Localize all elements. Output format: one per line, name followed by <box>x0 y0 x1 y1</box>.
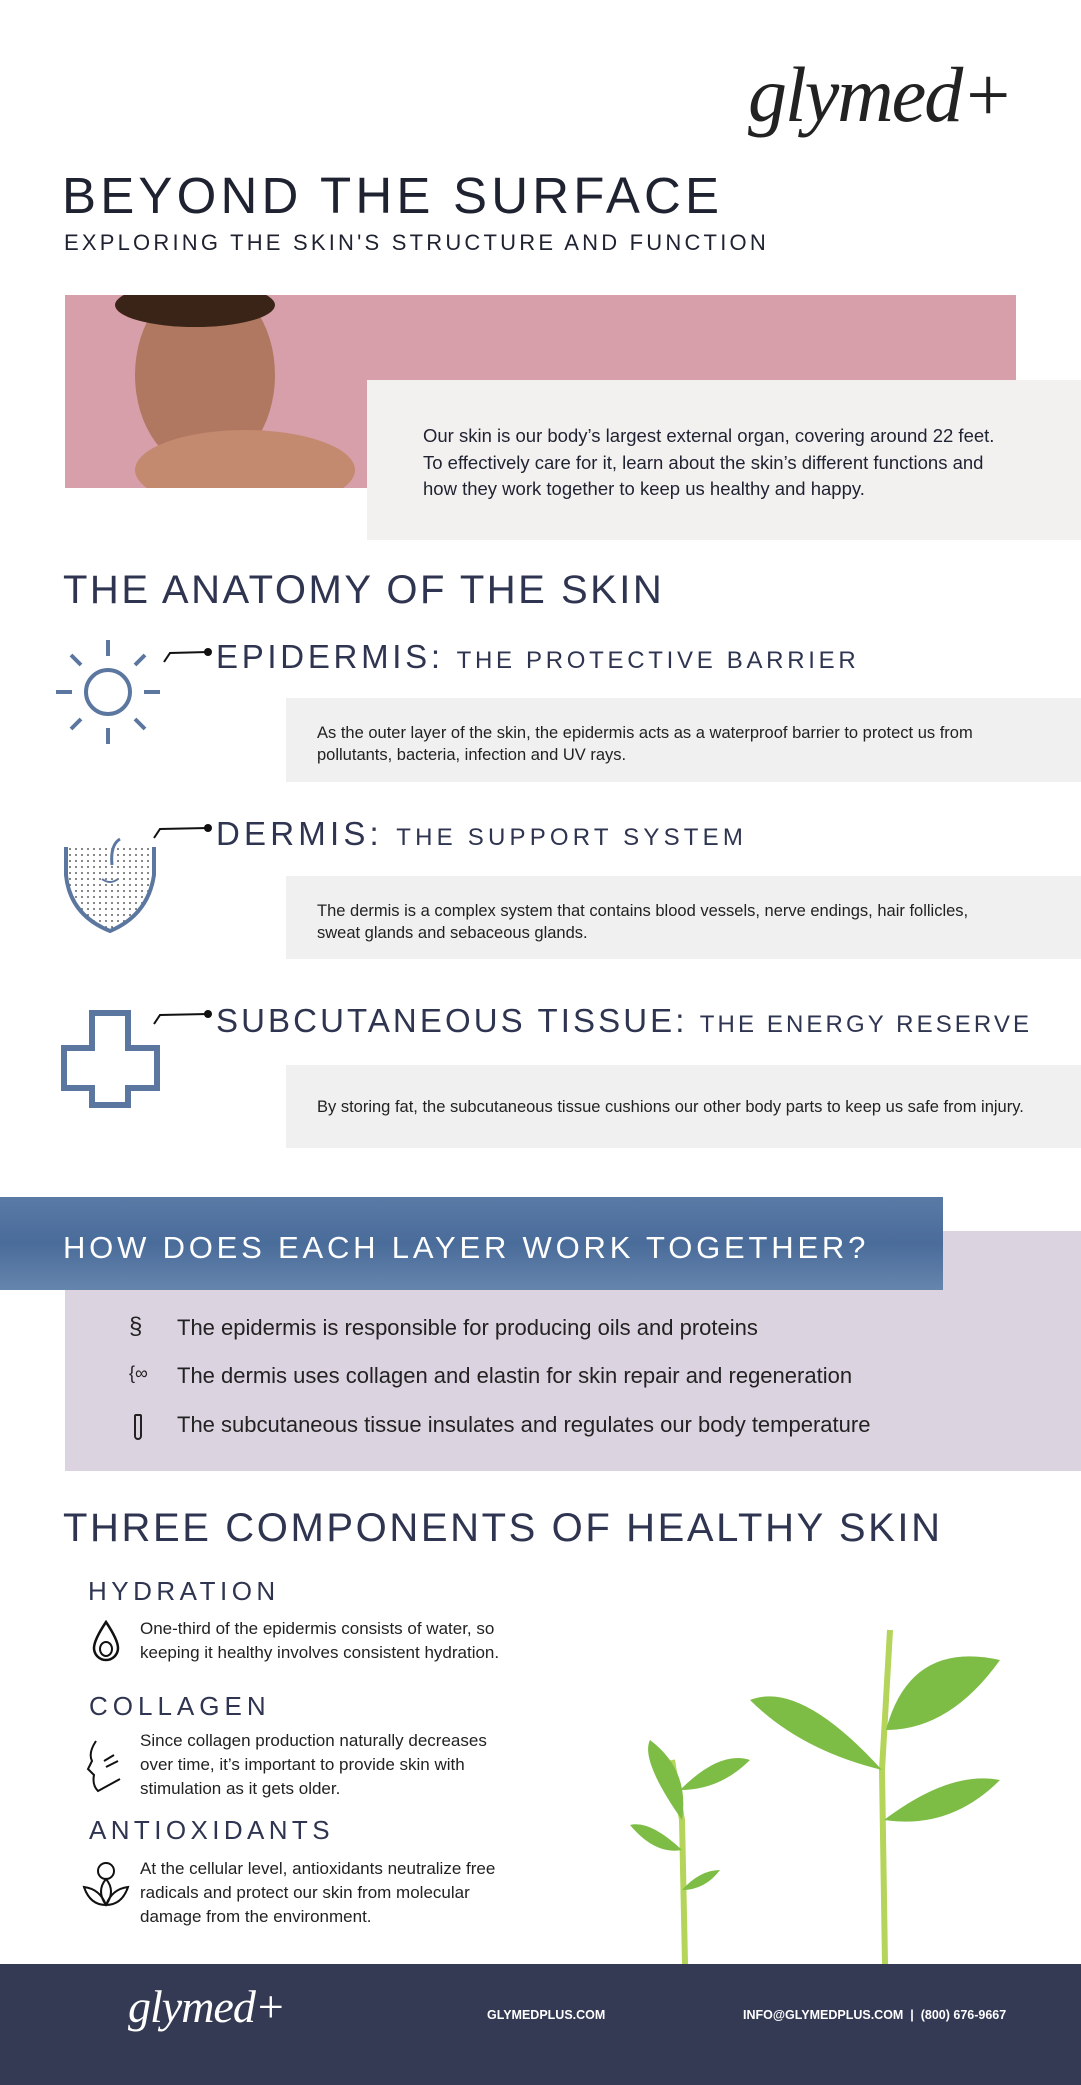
bullet 2: {∞ <box>129 1363 148 1383</box>
box: dermis: The dermis is a complex system that contains blood vessels, nerve endings, hair follicles, <box>317 902 968 920</box>
hydration block <box>88 1576 499 1662</box>
collagen block <box>86 1691 487 1798</box>
title: BEYOND THE SURFACE <box>62 167 723 224</box>
hero pink band with portrait <box>65 295 1016 488</box>
subtitle: EXPLORING THE SKIN'S STRUCTURE AND FUNCTION <box>64 230 769 255</box>
antioxidants block: At the cellular level, antioxidants neutralize free <box>140 1859 495 1878</box>
icon: leaves <box>82 1862 130 1907</box>
plants illustration <box>630 1630 1000 1964</box>
footer logo: glymed+ <box>128 1981 285 2032</box>
footer website: GLYMEDPLUS.COM <box>487 2008 605 2022</box>
bullet 2: The dermis uses collagen and elastin for skin repair and regeneration <box>177 1363 852 1388</box>
hydration block: keeping it healthy involves consistent hydration. <box>140 1643 499 1662</box>
collagen block: stimulation as it gets older. <box>140 1779 340 1798</box>
bullet 1: § <box>129 1313 142 1340</box>
collagen block: Since collagen production naturally decreases <box>140 1731 487 1750</box>
connector 3 <box>153 1010 212 1024</box>
portrait placeholder <box>115 295 355 488</box>
heading: three components: THREE COMPONENTS OF HEALTHY SKIN <box>63 1506 943 1550</box>
box: epidermis <box>286 698 1081 782</box>
connector 2 <box>153 824 212 838</box>
intro text box: To effectively care for it, learn about the skin’s different functions and <box>423 452 983 472</box>
blue band heading <box>0 1197 943 1290</box>
icon: cross <box>61 1010 160 1108</box>
heading: epidermis: EPIDERMIS: THE PROTECTIVE BARRIER <box>216 638 859 675</box>
heading: subcutaneous: SUBCUTANEOUS TISSUE: THE ENERGY RESERVE <box>216 1002 1032 1039</box>
box: subcutaneous: By storing fat, the subcutaneous tissue cushions our other body parts to keep us safe from injury. <box>317 1098 1024 1116</box>
logo: glymed+ <box>748 51 1012 138</box>
bullet 3: The subcutaneous tissue insulates and regulates our body temperature <box>177 1412 870 1437</box>
footer contact: INFO@GLYMEDPLUS.COM | (800) 676-9667 <box>743 2008 1006 2022</box>
icon: drop <box>92 1620 120 1662</box>
collagen block: COLLAGEN <box>89 1691 271 1721</box>
bullet 1: The epidermis is responsible for producing oils and proteins <box>177 1315 758 1340</box>
box: dermis <box>286 876 1081 959</box>
lavender panel: layers together <box>65 1231 1081 1471</box>
collagen block: over time, it’s important to provide skin with <box>140 1755 465 1774</box>
intro text box <box>367 380 1081 540</box>
antioxidants block <box>82 1815 495 1926</box>
box: epidermis: pollutants, bacteria, infection and UV rays. <box>317 746 626 764</box>
connector 1 <box>163 648 212 662</box>
blue band heading: HOW DOES EACH LAYER WORK TOGETHER? <box>63 1230 869 1265</box>
antioxidants block: radicals and protect our skin from molecular <box>140 1883 470 1902</box>
icon: sun <box>56 640 160 744</box>
intro text box: Our skin is our body’s largest external organ, covering around 22 feet. <box>423 425 994 446</box>
heading: dermis: DERMIS: THE SUPPORT SYSTEM <box>216 815 747 852</box>
hydration block: One-third of the epidermis consists of water, so <box>140 1619 494 1638</box>
antioxidants block: damage from the environment. <box>140 1907 372 1926</box>
icon: face <box>64 838 156 934</box>
icon: face profile <box>86 1740 120 1792</box>
antioxidants block: ANTIOXIDANTS <box>89 1815 334 1845</box>
box: epidermis: As the outer layer of the skin, the epidermis acts as a waterproof barrier to protect us from <box>317 724 973 742</box>
heading: anatomy: THE ANATOMY OF THE SKIN <box>63 568 664 612</box>
box: subcutaneous <box>286 1065 1081 1148</box>
hydration block: HYDRATION <box>88 1576 280 1606</box>
footer <box>0 1964 1081 2085</box>
box: dermis: sweat glands and sebaceous glands. <box>317 924 588 942</box>
intro text box: how they work together to keep us healthy and happy. <box>423 478 865 499</box>
